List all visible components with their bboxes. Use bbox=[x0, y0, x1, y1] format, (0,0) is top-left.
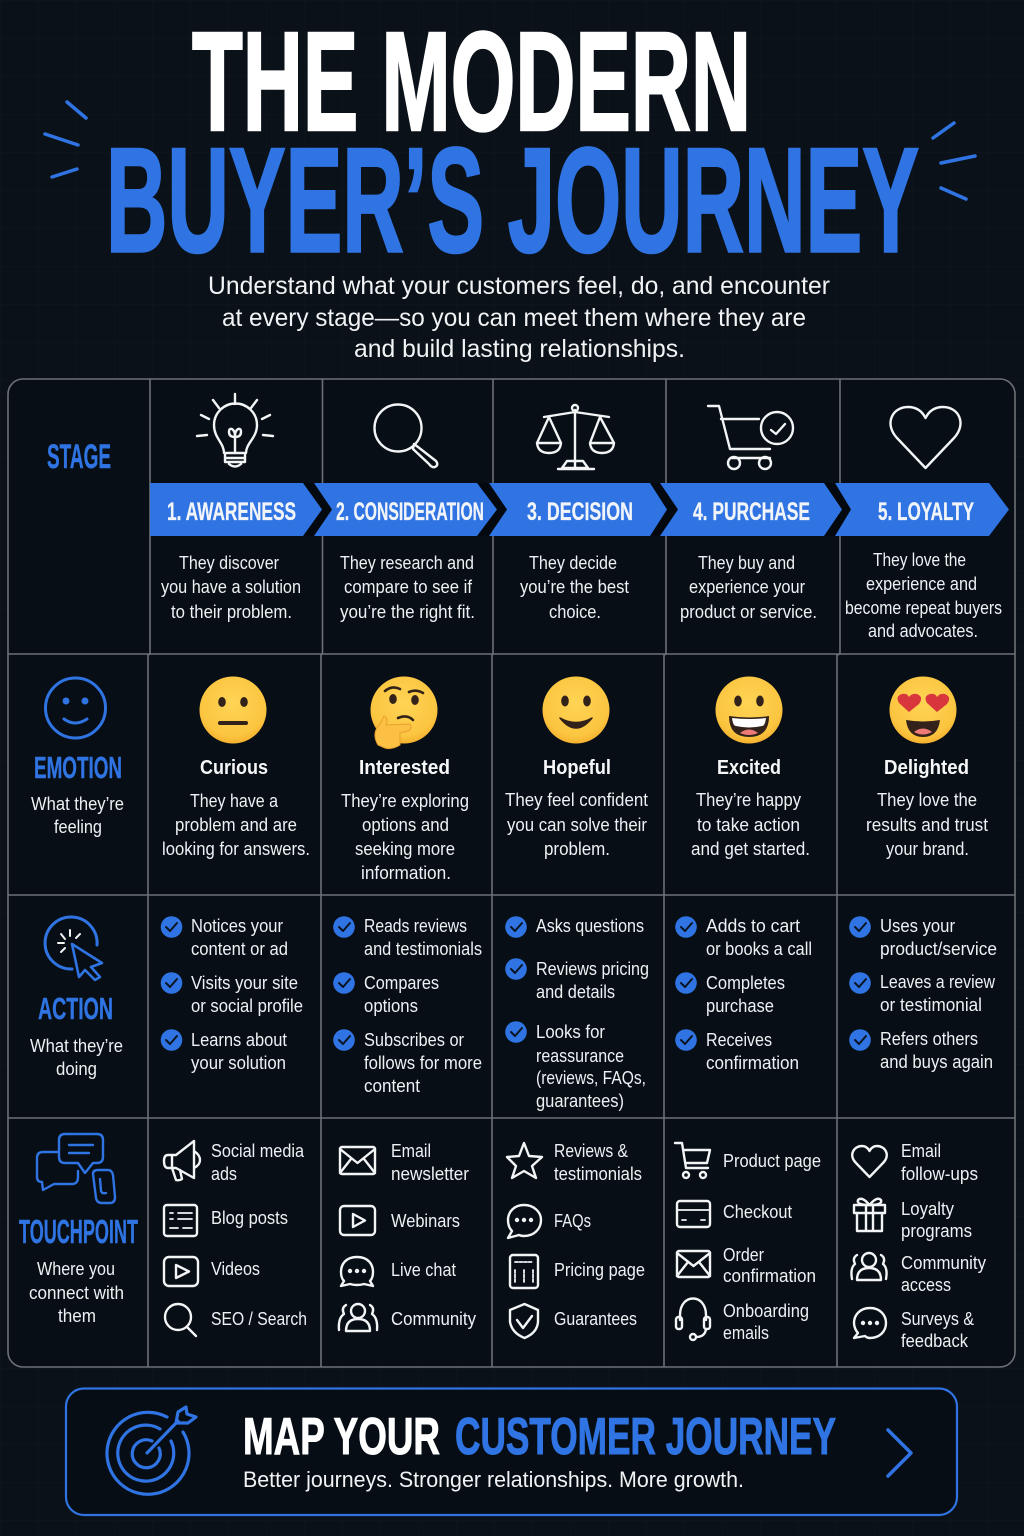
decision description: you’re the best bbox=[520, 577, 629, 597]
awareness actions: or social profile bbox=[191, 996, 303, 1016]
icon: chat bubbles and phone bbox=[37, 1134, 115, 1203]
consideration actions: and testimonials bbox=[364, 939, 482, 959]
icon: cart bbox=[675, 1143, 710, 1178]
icon: small heart bbox=[852, 1146, 887, 1177]
loyalty touchpoints: follow-ups bbox=[901, 1164, 978, 1184]
excited text: They’re happy bbox=[696, 790, 801, 810]
icon: blog post bbox=[164, 1205, 197, 1236]
curious text: They have a bbox=[190, 791, 279, 811]
panel: action row bbox=[30, 916, 997, 1111]
stage 3 chevron bbox=[489, 483, 667, 536]
stage 4 chevron: 4. PURCHASE bbox=[693, 498, 810, 526]
icon: chevron arrow bbox=[888, 1430, 911, 1476]
loyalty touchpoints: programs bbox=[901, 1221, 972, 1241]
loyalty description: and advocates. bbox=[868, 621, 978, 641]
consideration description: compare to see if bbox=[344, 577, 473, 597]
icon: heart bbox=[891, 407, 960, 468]
icon: outline smiley bbox=[46, 678, 106, 738]
icon: faq bubble bbox=[508, 1205, 541, 1238]
consideration actions: follows for more bbox=[364, 1053, 482, 1073]
awareness actions: content or ad bbox=[191, 939, 288, 959]
icon: video bbox=[164, 1257, 198, 1286]
awareness actions bbox=[161, 916, 303, 1073]
consideration description: you’re the right fit. bbox=[340, 602, 475, 622]
curious text: looking for answers. bbox=[162, 839, 310, 859]
decision touchpoints: Reviews & bbox=[554, 1141, 628, 1161]
panel: stage row bbox=[47, 394, 1009, 641]
delighted text: They love the bbox=[877, 790, 977, 810]
loyalty actions: and buys again bbox=[880, 1052, 993, 1072]
consideration touchpoints: Webinars bbox=[391, 1211, 460, 1231]
row label: action: What they’re bbox=[30, 1036, 123, 1056]
loyalty touchpoints: Email bbox=[901, 1141, 941, 1161]
panel: touchpoint row bbox=[19, 1134, 986, 1351]
decision description bbox=[520, 553, 629, 622]
subtitle: and build lasting relationships. bbox=[354, 335, 685, 363]
emoji: grinning face bbox=[716, 676, 782, 744]
purchase actions: Adds to cart bbox=[706, 916, 800, 936]
loyalty touchpoints: Loyalty bbox=[901, 1199, 954, 1219]
consideration actions: content bbox=[364, 1076, 420, 1096]
purchase touchpoints: Checkout bbox=[723, 1202, 792, 1222]
decision actions bbox=[505, 916, 649, 1111]
icon: left burst rays bbox=[45, 102, 86, 177]
excited text: to take action bbox=[697, 815, 800, 835]
loyalty actions: Uses your bbox=[880, 916, 955, 936]
consideration touchpoints: Email bbox=[391, 1141, 431, 1161]
row label: emotion: EMOTION bbox=[34, 750, 122, 785]
consideration actions: Reads reviews bbox=[364, 916, 467, 936]
icon: star bbox=[507, 1143, 542, 1178]
banner heading: MAP YOUR bbox=[243, 1408, 440, 1466]
icon: balance scale bbox=[537, 405, 614, 469]
stage 5 chevron bbox=[835, 483, 1009, 536]
awareness touchpoints: ads bbox=[211, 1164, 237, 1184]
purchase description: product or service. bbox=[680, 602, 817, 622]
consideration actions: Subscribes or bbox=[364, 1030, 464, 1050]
row label: touchpoint bbox=[19, 1213, 138, 1326]
purchase touchpoints: Onboarding bbox=[723, 1301, 809, 1321]
loyalty description: They love the bbox=[873, 550, 966, 570]
row label: emotion bbox=[31, 750, 124, 837]
loyalty actions: product/service bbox=[880, 939, 997, 959]
stage 3 chevron: 3. DECISION bbox=[527, 498, 633, 526]
icon: community bbox=[339, 1304, 377, 1331]
loyalty touchpoints bbox=[851, 1141, 986, 1351]
row label: stage: STAGE bbox=[47, 438, 111, 476]
purchase actions: Completes bbox=[706, 973, 785, 993]
row label: touchpoint: them bbox=[58, 1306, 96, 1326]
delighted text: results and trust bbox=[866, 815, 988, 835]
awareness description: to their problem. bbox=[171, 602, 292, 622]
row label: touchpoint: TOUCHPOINT bbox=[19, 1213, 138, 1250]
loyalty touchpoints: feedback bbox=[901, 1331, 969, 1351]
decision touchpoints: Pricing page bbox=[554, 1260, 645, 1280]
icon: community group bbox=[851, 1253, 887, 1280]
subtitle: Understand what your customers feel, do, and encounter bbox=[208, 272, 830, 300]
interested text bbox=[341, 757, 469, 883]
loyalty actions bbox=[849, 916, 997, 1072]
consideration touchpoints: newsletter bbox=[391, 1164, 469, 1184]
hopeful text: problem. bbox=[544, 839, 610, 859]
emoji: heart-eyes face bbox=[890, 676, 956, 744]
interested text: Interested bbox=[359, 757, 450, 779]
consideration touchpoints: Live chat bbox=[391, 1260, 456, 1280]
awareness touchpoints: SEO / Search bbox=[211, 1309, 307, 1329]
decision touchpoints: Guarantees bbox=[554, 1309, 637, 1329]
awareness touchpoints: Social media bbox=[211, 1141, 305, 1161]
icon: search bbox=[165, 1304, 196, 1336]
row label: touchpoint: Where you bbox=[37, 1259, 115, 1279]
interested text: They’re exploring bbox=[341, 791, 469, 811]
decision actions: and details bbox=[536, 982, 615, 1002]
row label: touchpoint: connect with bbox=[29, 1283, 124, 1303]
panel: emotion row bbox=[31, 676, 988, 883]
excited text: Excited bbox=[717, 757, 781, 779]
icon: pricing calculator bbox=[510, 1255, 538, 1288]
icon: gift bbox=[854, 1199, 885, 1231]
subtitle: at every stage—so you can meet them where they are bbox=[222, 304, 806, 332]
delighted text: Delighted bbox=[884, 757, 969, 779]
banner tagline: Better journeys. Stronger relationships. More growth. bbox=[243, 1467, 744, 1492]
purchase actions: confirmation bbox=[706, 1053, 799, 1073]
icon: light bulb bbox=[197, 394, 273, 466]
icon: live chat bbox=[341, 1257, 373, 1286]
icon: shopping cart with check bbox=[708, 406, 793, 469]
icon: target with arrow bbox=[107, 1407, 196, 1494]
purchase touchpoints: confirmation bbox=[723, 1266, 816, 1286]
purchase touchpoints: Product page bbox=[723, 1151, 821, 1171]
consideration actions: options bbox=[364, 996, 418, 1016]
decision actions: (reviews, FAQs, bbox=[536, 1068, 646, 1088]
awareness description: They discover bbox=[179, 553, 279, 573]
decision touchpoints: testimonials bbox=[554, 1164, 642, 1184]
row label: action: ACTION bbox=[38, 991, 113, 1026]
delighted text: your brand. bbox=[886, 839, 969, 859]
chevron dividers bbox=[303, 483, 853, 536]
journey table frame bbox=[8, 379, 1015, 1367]
awareness touchpoints: Blog posts bbox=[211, 1208, 288, 1228]
decision actions: guarantees) bbox=[536, 1091, 624, 1111]
purchase description bbox=[680, 553, 817, 622]
interested text: options and bbox=[362, 815, 449, 835]
stage 1 chevron: 1. AWARENESS bbox=[167, 498, 296, 526]
loyalty touchpoints: Surveys & bbox=[901, 1309, 974, 1329]
loyalty touchpoints: Community bbox=[901, 1253, 986, 1273]
consideration touchpoints: Community bbox=[391, 1309, 476, 1329]
banner heading: CUSTOMER JOURNEY bbox=[455, 1408, 836, 1466]
emoji: thinking face bbox=[370, 676, 438, 749]
curious text: Curious bbox=[200, 757, 268, 779]
icon: order envelope bbox=[677, 1251, 710, 1277]
interested text: seeking more bbox=[355, 839, 455, 859]
awareness description bbox=[161, 553, 301, 622]
delighted text bbox=[866, 757, 988, 859]
loyalty actions: Refers others bbox=[880, 1029, 978, 1049]
icon: guarantee shield bbox=[510, 1304, 538, 1338]
decision description: choice. bbox=[549, 602, 601, 622]
stage 5 chevron: 5. LOYALTY bbox=[878, 498, 974, 526]
consideration touchpoints bbox=[339, 1141, 476, 1331]
subtitle bbox=[208, 272, 830, 363]
emoji: neutral face bbox=[200, 676, 266, 744]
icon: magnifying glass bbox=[374, 404, 437, 467]
purchase touchpoints: Order bbox=[723, 1245, 764, 1265]
stage 2 chevron bbox=[314, 483, 497, 536]
decision touchpoints bbox=[507, 1141, 645, 1338]
curious text bbox=[162, 757, 310, 859]
awareness description: you have a solution bbox=[161, 577, 301, 597]
curious text: problem and are bbox=[175, 815, 297, 835]
decision actions: Reviews pricing bbox=[536, 959, 649, 979]
purchase actions: or books a call bbox=[706, 939, 812, 959]
row label: emotion: feeling bbox=[54, 817, 102, 837]
row label: action bbox=[30, 991, 123, 1079]
hopeful text: They feel confident bbox=[505, 790, 648, 810]
loyalty actions: Leaves a review bbox=[880, 972, 996, 992]
decision description: They decide bbox=[529, 553, 617, 573]
awareness actions: your solution bbox=[191, 1053, 286, 1073]
purchase description: experience your bbox=[689, 577, 805, 597]
purchase description: They buy and bbox=[698, 553, 795, 573]
excited text bbox=[691, 757, 810, 859]
icon: right burst rays bbox=[933, 123, 975, 199]
banner heading bbox=[243, 1408, 836, 1466]
awareness actions: Learns about bbox=[191, 1030, 287, 1050]
consideration actions: Compares bbox=[364, 973, 439, 993]
hopeful text: you can solve their bbox=[507, 815, 647, 835]
icon: click cursor bbox=[45, 917, 102, 980]
hopeful text: Hopeful bbox=[543, 757, 611, 779]
purchase actions bbox=[675, 916, 812, 1073]
call to action banner bbox=[66, 1388, 957, 1515]
icon: envelope bbox=[340, 1147, 375, 1174]
stage 4 chevron bbox=[660, 483, 842, 536]
purchase actions: purchase bbox=[706, 996, 774, 1016]
awareness actions: Notices your bbox=[191, 916, 283, 936]
awareness touchpoints: Videos bbox=[211, 1259, 260, 1279]
interested text: information. bbox=[361, 863, 451, 883]
purchase actions: Receives bbox=[706, 1030, 772, 1050]
awareness touchpoints bbox=[164, 1141, 307, 1336]
emoji: smiling face bbox=[542, 676, 610, 744]
icon: megaphone bbox=[164, 1141, 200, 1180]
loyalty description: become repeat buyers bbox=[845, 598, 1002, 618]
excited text: and get started. bbox=[691, 839, 810, 859]
decision actions: reassurance bbox=[536, 1046, 624, 1066]
consideration description bbox=[340, 553, 475, 622]
icon: credit card bbox=[677, 1201, 710, 1227]
stage 2 chevron: 2. CONSIDERATION bbox=[336, 498, 484, 526]
hopeful text bbox=[505, 757, 648, 859]
icon: survey bubble bbox=[854, 1308, 886, 1338]
purchase touchpoints bbox=[675, 1143, 821, 1343]
loyalty touchpoints: access bbox=[901, 1275, 951, 1295]
awareness actions: Visits your site bbox=[191, 973, 298, 993]
loyalty actions: or testimonial bbox=[880, 995, 982, 1015]
decision touchpoints: FAQs bbox=[554, 1211, 591, 1231]
icon: webinar play bbox=[340, 1206, 375, 1235]
row label: emotion: What they’re bbox=[31, 794, 124, 814]
loyalty description: experience and bbox=[866, 574, 977, 594]
decision actions: Asks questions bbox=[536, 916, 644, 936]
title bbox=[106, 2, 919, 284]
loyalty description bbox=[845, 550, 1002, 641]
consideration description: They research and bbox=[340, 553, 474, 573]
stage 1 chevron bbox=[150, 483, 322, 536]
decision actions: Looks for bbox=[536, 1022, 605, 1042]
purchase touchpoints: emails bbox=[723, 1323, 769, 1343]
icon: headset bbox=[676, 1298, 710, 1340]
row label: action: doing bbox=[56, 1059, 97, 1079]
consideration actions bbox=[333, 916, 482, 1096]
